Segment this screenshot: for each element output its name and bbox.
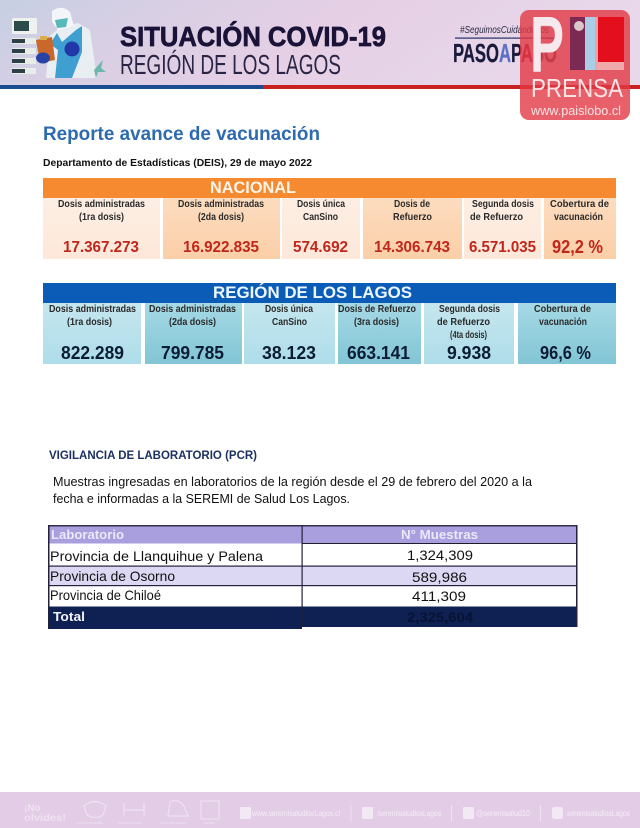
stat: refuerzo (338, 303, 421, 364)
contact: instagram (552, 807, 630, 819)
row: chiloe: 411,309 (412, 588, 466, 604)
row: llanquihue y palena (48, 544, 577, 566)
panel: region de los lagos (43, 283, 616, 364)
stat: refuerzo: Dosis de Refuerzo (338, 304, 416, 315)
row: osorno: 589,986 (412, 569, 467, 585)
campaign logo: paso a paso (453, 25, 557, 68)
contact: website: www.seremisaludlosLagos.cl (251, 809, 340, 818)
row: llanquihue y palena: 1,324,309 (407, 547, 473, 563)
stat: 1ra dosis: Dosis administradas (58, 199, 145, 210)
stat: 2da dosis: Dosis administradas (178, 199, 264, 210)
stat: 2da dosis: 799.785 (161, 343, 224, 363)
stat: refuerzo: (3ra dosis) (354, 317, 399, 328)
stat: 1ra dosis: 822.289 (61, 343, 124, 363)
contact: facebook: /seremisaludlosLagos (377, 809, 441, 818)
stat: dosis unica: Dosis única (265, 304, 313, 315)
stat: cobertura: vacunación (539, 317, 587, 328)
icon: health worker with monitors (12, 8, 106, 78)
stat: segunda dosis de refuerzo: de Refuerzo (437, 317, 490, 328)
stat: refuerzo (363, 198, 462, 259)
row: total (48, 606, 577, 629)
stat: 2da dosis: 16.922.835 (183, 239, 259, 256)
row: chiloe: Provincia de Chiloé (50, 587, 161, 603)
table header (48, 525, 577, 544)
row: llanquihue y palena: Provincia de Llanquihue y Palena (50, 548, 263, 564)
stat: dosis unica: CanSino (272, 317, 307, 328)
stat: dosis unica (244, 303, 335, 364)
report heading: Reporte avance de vacunación (43, 124, 320, 145)
stat: cobertura (544, 198, 616, 259)
stat: segunda dosis de refuerzo: 9.938 (447, 343, 491, 363)
watermark: PL Prensa badge (520, 0, 630, 120)
table header: N° Muestras (401, 527, 478, 542)
stat: segunda dosis de refuerzo (424, 303, 514, 364)
contact: twitter (463, 807, 530, 819)
reminder text: ¡No (24, 803, 41, 814)
icons: prevention measures: Lavar tus manos (160, 821, 186, 825)
row: osorno: Provincia de Osorno (50, 568, 175, 584)
campaign logo: paso a paso: #SeguimosCuidándonos (460, 25, 549, 36)
row: total: Total (53, 609, 85, 624)
title: SITUACIÓN COVID-19 (120, 21, 386, 52)
contact: twitter: @seremisalud10 (476, 809, 530, 818)
icons: prevention measures: Lavar mascarillas (76, 821, 103, 825)
stat: dosis unica: CanSino (303, 212, 338, 223)
stat: refuerzo: Refuerzo (393, 212, 432, 223)
prensa label: PRENSA (531, 73, 624, 103)
icons: prevention measures: Ventilar (203, 821, 216, 825)
stat: segunda dosis de refuerzo: Segunda dosis (439, 304, 500, 315)
stat: cobertura (518, 303, 616, 364)
stat: segunda dosis de refuerzo: (4ta dosis) (450, 330, 487, 341)
stat: 1ra dosis: Dosis administradas (49, 304, 136, 315)
stat: cobertura: 92,2 % (552, 237, 603, 257)
laboratory section heading: VIGILANCIA DE LABORATORIO (PCR) (49, 448, 257, 462)
contact: website (240, 807, 340, 819)
laboratory description: Muestras ingresadas en laboratorios de la región desde el 29 de febrero del 2020 a la (53, 474, 533, 489)
table header: Laboratorio (51, 527, 124, 542)
table: muestras por provincia (48, 525, 578, 629)
panel: nacional (43, 178, 616, 259)
nacional heading (43, 178, 616, 198)
stat: refuerzo: 663.141 (347, 343, 410, 363)
stat: segunda dosis de refuerzo: Segunda dosis (472, 199, 534, 210)
stat: 2da dosis (145, 303, 242, 364)
subtitle: REGIÓN DE LOS LAGOS (120, 49, 341, 80)
stat: 2da dosis: (2da dosis) (169, 317, 216, 328)
icons: prevention measures: Distancia física (118, 821, 142, 825)
footer band (0, 792, 640, 828)
stat: segunda dosis de refuerzo (464, 198, 541, 259)
icons: prevention measures (76, 801, 219, 825)
stat: cobertura: 96,6 % (540, 343, 591, 363)
reminder text: olvides! (24, 813, 66, 824)
region heading: REGIÓN DE LOS LAGOS (213, 283, 412, 302)
stat: refuerzo: 14.306.743 (374, 239, 450, 256)
stat: 2da dosis: (2da dosis) (198, 212, 244, 223)
page header banner (0, 0, 640, 89)
logo P: P (530, 0, 564, 89)
stat: dosis unica (282, 198, 360, 259)
stat: cobertura: vacunación (554, 212, 603, 223)
contact: instagram: seremisaludlosLagos (567, 809, 630, 818)
stat: cobertura: Cobertura de (534, 304, 591, 315)
laboratory description (53, 474, 533, 506)
stat: 1ra dosis: (1ra dosis) (67, 317, 112, 328)
stat: 1ra dosis (43, 198, 160, 259)
stat: cobertura: Cobertura de (550, 199, 609, 210)
report source and date: Departamento de Estadísticas (DEIS), 29 de mayo 2022 (43, 158, 312, 169)
stat: segunda dosis de refuerzo: de Refuerzo (470, 212, 523, 223)
stat: 1ra dosis: 17.367.273 (63, 239, 139, 256)
stat: 1ra dosis: (1ra dosis) (79, 212, 124, 223)
laboratory description: fecha e informadas a la SEREMI de Salud Los Lagos. (53, 491, 350, 506)
campaign logo: paso a paso: PASOAPASO (453, 38, 557, 68)
seremi flag block (570, 17, 624, 70)
stat: 1ra dosis (43, 303, 141, 364)
row: total: 2,325,604 (407, 609, 473, 625)
stat: 2da dosis: Dosis administradas (149, 304, 236, 315)
stat: segunda dosis de refuerzo: 6.571.035 (469, 239, 536, 256)
row: osorno (48, 566, 577, 585)
stat: 2da dosis (163, 198, 280, 259)
contact: facebook (362, 807, 441, 819)
watermark url: www.paislobo.cl (530, 103, 621, 118)
stat: refuerzo: Dosis de (394, 199, 430, 210)
region heading (43, 283, 616, 303)
row: chiloe (48, 585, 577, 606)
stat: dosis unica: Dosis única (297, 199, 345, 210)
stat: dosis unica: 574.692 (293, 239, 348, 256)
nacional heading: NACIONAL (210, 179, 296, 197)
stat: dosis unica: 38.123 (262, 343, 316, 363)
